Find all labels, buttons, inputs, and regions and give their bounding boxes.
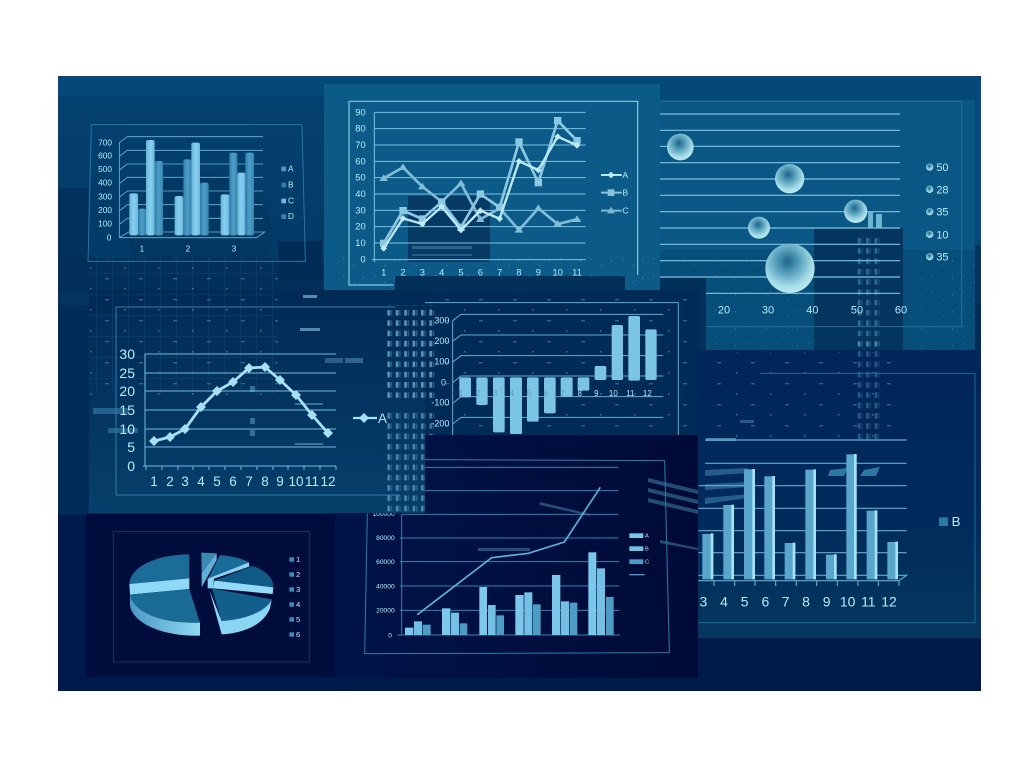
- x axis labels: 9: [823, 593, 831, 609]
- slice: lower right: [209, 588, 272, 634]
- chart frame: [116, 307, 400, 495]
- x axis labels: 7: [782, 593, 790, 609]
- x axis labels: 6: [543, 389, 548, 398]
- legend: 5: [296, 615, 300, 624]
- legend: 6: [296, 630, 300, 639]
- x axis labels: 6: [229, 474, 237, 489]
- chart frame: [88, 125, 305, 261]
- x axis labels: 8: [577, 389, 582, 398]
- x axis labels: 3: [699, 593, 707, 609]
- x axis labels: 3: [181, 474, 189, 489]
- x axis labels: 4: [720, 593, 728, 609]
- data markers: [149, 362, 333, 446]
- legend: B: [622, 188, 628, 198]
- bars: [702, 454, 898, 579]
- y axis labels: 60: [355, 156, 366, 166]
- y axis labels: 20000: [376, 608, 395, 615]
- x axis labels: 4: [510, 389, 515, 398]
- building: dark tower behind bubble chart: [814, 212, 903, 350]
- x axis labels: 9: [536, 268, 541, 278]
- y axis labels: 0: [127, 458, 135, 474]
- legend: [281, 163, 294, 221]
- chart frame: [365, 460, 669, 654]
- y axis labels: 100000: [372, 511, 395, 518]
- legend: D: [288, 211, 294, 221]
- slice: small top: [201, 553, 217, 587]
- series C: [379, 163, 581, 233]
- x axis labels: 9: [594, 389, 599, 398]
- legend: 28: [936, 184, 949, 196]
- texture: tilted building lights: [478, 468, 748, 551]
- bubbles: [667, 134, 867, 293]
- legend: B: [952, 514, 961, 529]
- legend: A: [622, 170, 628, 180]
- x axis labels: 2: [476, 389, 481, 398]
- y axis labels: 60000: [376, 559, 395, 566]
- chart: right column chart: [698, 373, 975, 623]
- x axis labels: 12: [643, 389, 652, 398]
- legend: B: [645, 547, 649, 553]
- legend: A: [288, 163, 294, 173]
- legend: 1: [296, 555, 300, 564]
- chart: line chart 0 to 30: [116, 307, 400, 495]
- chart: multi-line chart: [349, 101, 638, 285]
- x axis labels: [699, 593, 897, 609]
- trend line: [417, 487, 600, 615]
- panel: combo chart backdrop: [335, 435, 698, 678]
- x axis labels: 11: [626, 389, 635, 398]
- x axis labels: 2: [400, 268, 406, 278]
- x axis labels: 11: [305, 474, 319, 489]
- building: lit tower windows: [385, 305, 436, 513]
- y axis labels: 30: [355, 205, 366, 215]
- gridlines: [372, 112, 586, 262]
- data line: [154, 367, 328, 441]
- legend: [353, 411, 387, 426]
- y axis labels: 300: [98, 191, 112, 201]
- chart frame: [425, 303, 678, 435]
- y axis labels: 10: [355, 238, 366, 248]
- slice: upper right: [208, 555, 249, 588]
- y axis labels: 100: [434, 356, 449, 366]
- legend: 35: [936, 252, 949, 264]
- chart: 3D column chart: [88, 125, 305, 261]
- chart frame: [698, 373, 975, 623]
- y axis labels: 40: [355, 189, 366, 199]
- y axis labels: 80: [355, 124, 366, 134]
- x axis labels: 20: [718, 305, 730, 317]
- y axis labels: 300: [434, 316, 449, 326]
- y axis labels: 90: [355, 107, 366, 117]
- x axis labels: 3: [493, 389, 498, 398]
- x axis labels: 10: [552, 268, 563, 278]
- series A: [380, 133, 580, 252]
- y axis labels: [119, 346, 135, 474]
- x axis labels: 2: [186, 244, 191, 254]
- legend: C: [645, 560, 649, 566]
- y axis labels: 200: [98, 205, 112, 215]
- x axis labels: 7: [560, 389, 565, 398]
- gridlines: [397, 467, 620, 635]
- y axis labels: 5: [127, 439, 135, 455]
- y axis labels: 15: [119, 402, 135, 418]
- x axis labels: 4: [439, 268, 444, 278]
- panel: dark block corner in bubble chart: [660, 276, 706, 350]
- legend: C: [288, 195, 294, 205]
- chart: positive and negative column chart: [425, 303, 678, 435]
- panel: multi-line chart backdrop: [324, 84, 660, 290]
- legend: [939, 514, 961, 529]
- panel: negative column chart backdrop: [425, 290, 700, 435]
- legend: C: [622, 205, 629, 215]
- legend: 50: [936, 162, 949, 174]
- legend: [289, 555, 301, 639]
- y axis labels: 20: [119, 383, 135, 399]
- y axis labels: 80000: [376, 535, 395, 542]
- gridlines: [698, 440, 907, 586]
- y axis labels: -100: [431, 398, 449, 408]
- slice: left upper: [129, 554, 189, 595]
- legend: A: [378, 411, 387, 426]
- legend: [601, 170, 629, 215]
- legend: [629, 533, 649, 575]
- chart: combo column and line chart: [365, 460, 669, 654]
- city skyline lights over panels: [335, 250, 975, 350]
- y axis labels: [98, 137, 112, 243]
- y axis labels: 400: [98, 178, 112, 188]
- x axis labels: 2: [166, 474, 174, 489]
- bars: [405, 552, 614, 635]
- x axis labels: 10: [288, 474, 304, 489]
- x axis labels: 9: [276, 474, 284, 489]
- x axis labels: 11: [861, 593, 876, 609]
- panel: pie chart backdrop: [86, 514, 335, 677]
- x axis labels: 5: [527, 389, 532, 398]
- x axis labels: 8: [802, 593, 810, 609]
- x axis labels: 50: [851, 305, 863, 317]
- texture: grid building at left of the line chart: [88, 290, 363, 445]
- legend: 10: [936, 229, 949, 241]
- x axis labels: 8: [516, 268, 522, 278]
- x axis labels: 1: [381, 268, 386, 278]
- city texture in negative column panel: [425, 290, 700, 435]
- legend: A: [645, 534, 649, 540]
- legend: B: [288, 179, 294, 189]
- y axis labels: 10: [119, 421, 135, 437]
- x axis labels: 1: [150, 474, 158, 489]
- x axis labels: [381, 268, 582, 278]
- y axis labels: 600: [98, 151, 112, 161]
- bars: [129, 140, 254, 235]
- gridlines: [660, 114, 900, 293]
- gridlines: [143, 354, 336, 470]
- y axis labels: 0: [360, 255, 366, 265]
- series B: [380, 117, 581, 247]
- background image area: [58, 76, 981, 691]
- gridlines: [453, 314, 663, 435]
- city texture in right column chart: [706, 342, 906, 476]
- x axis labels: 5: [458, 268, 464, 278]
- x axis labels: 7: [497, 268, 502, 278]
- panel: 3D column chart backdrop: [58, 96, 338, 290]
- chart frame: [660, 101, 962, 327]
- y axis labels: 0: [388, 632, 392, 639]
- x axis labels: 30: [762, 305, 774, 317]
- y axis labels: 0: [441, 377, 446, 387]
- y axis labels: 500: [98, 164, 112, 174]
- x axis labels: 1: [459, 389, 464, 398]
- x axis labels: 10: [840, 593, 856, 609]
- legend: 35: [936, 207, 949, 219]
- y axis labels: 100: [98, 219, 112, 229]
- x axis labels: 40: [806, 305, 818, 317]
- x axis labels: 1: [140, 244, 145, 254]
- y axis labels: 70: [355, 140, 366, 150]
- y axis labels: 700: [98, 137, 112, 147]
- x axis labels: 12: [320, 474, 336, 489]
- panel: right column chart backdrop: [698, 350, 981, 638]
- x axis labels: 10: [609, 389, 618, 398]
- x axis labels: [718, 305, 907, 317]
- y axis labels: 0: [107, 233, 112, 243]
- y axis labels: 50: [355, 173, 366, 183]
- legend: 4: [296, 600, 301, 609]
- y axis labels: 200: [434, 336, 449, 346]
- x axis labels: [140, 244, 237, 254]
- y axis labels: -200: [431, 418, 449, 428]
- chart: bubble chart: [660, 101, 962, 327]
- x axis labels: 3: [420, 268, 425, 278]
- y axis labels: [355, 107, 366, 265]
- bars: [459, 316, 657, 434]
- x axis labels: 4: [197, 474, 205, 489]
- x axis labels: 11: [572, 268, 582, 278]
- y axis labels: 25: [119, 365, 135, 381]
- legend: [926, 162, 949, 264]
- x axis labels: 3: [232, 244, 237, 254]
- x axis labels: 6: [761, 593, 769, 609]
- x axis labels: 7: [245, 474, 253, 489]
- chart: 3D exploded pie chart: [113, 532, 309, 662]
- slice: left lower: [130, 589, 200, 636]
- building: dark block in line chart: [395, 196, 625, 290]
- legend: 2: [296, 570, 300, 579]
- building: dark silhouettes at left: [58, 174, 323, 292]
- chart frame: [113, 532, 309, 662]
- x axis labels: [459, 389, 652, 398]
- panel: area chart backdrop: [89, 290, 425, 513]
- x axis labels: 5: [213, 474, 221, 489]
- y axis labels: 30: [119, 346, 135, 362]
- x axis labels: 6: [478, 268, 483, 278]
- slice: right: [213, 566, 273, 594]
- y axis labels: 20: [355, 222, 366, 232]
- y axis labels: [372, 511, 395, 639]
- x axis labels: 5: [741, 593, 749, 609]
- chart frame: [349, 101, 638, 285]
- x axis labels: 12: [881, 593, 897, 609]
- x axis labels: [150, 474, 336, 489]
- panel: bubble chart backdrop: [660, 100, 975, 350]
- gridlines: [119, 137, 265, 238]
- y axis labels: 40000: [376, 583, 395, 590]
- x axis labels: 60: [895, 305, 907, 317]
- legend: 3: [296, 585, 300, 594]
- x axis labels: 8: [261, 474, 269, 489]
- y axis labels: [431, 316, 449, 428]
